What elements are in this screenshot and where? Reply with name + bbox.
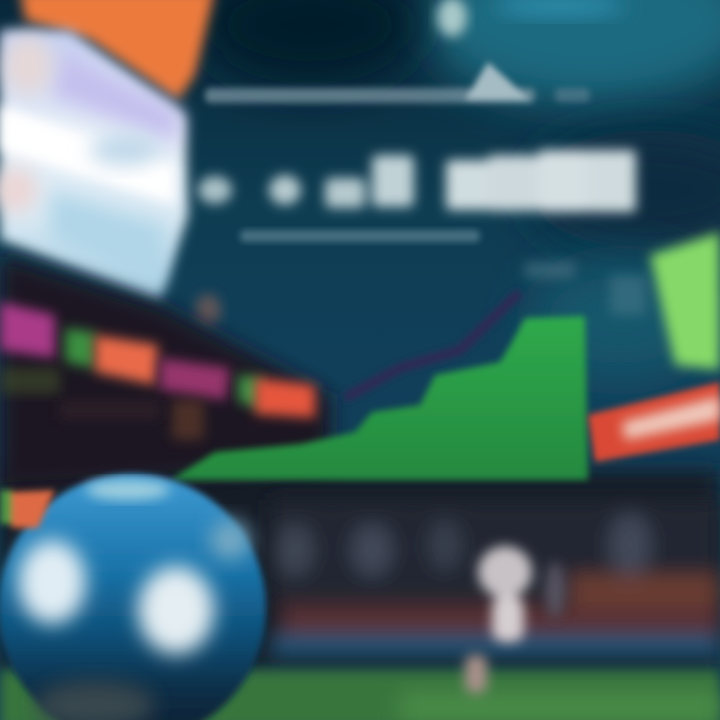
heading: blurred title line [205,62,590,103]
heading: blurred large title [198,150,636,212]
red banner [588,382,720,462]
grass field [0,670,720,720]
small orange tag [0,490,55,528]
orange panel [20,0,215,100]
player figure [465,546,565,693]
dashboard card [0,30,188,300]
colored legend bars [0,302,315,440]
icon: top glow [437,0,467,37]
crowd [270,500,720,657]
green corner panel [650,232,720,370]
dark left band [0,255,330,490]
small marker [195,294,221,326]
area chart [170,316,588,480]
subtitle: blurred line [240,230,480,242]
small faint labels [525,262,646,315]
football [0,474,266,720]
trend line [345,292,520,398]
dark lower band [0,470,720,670]
